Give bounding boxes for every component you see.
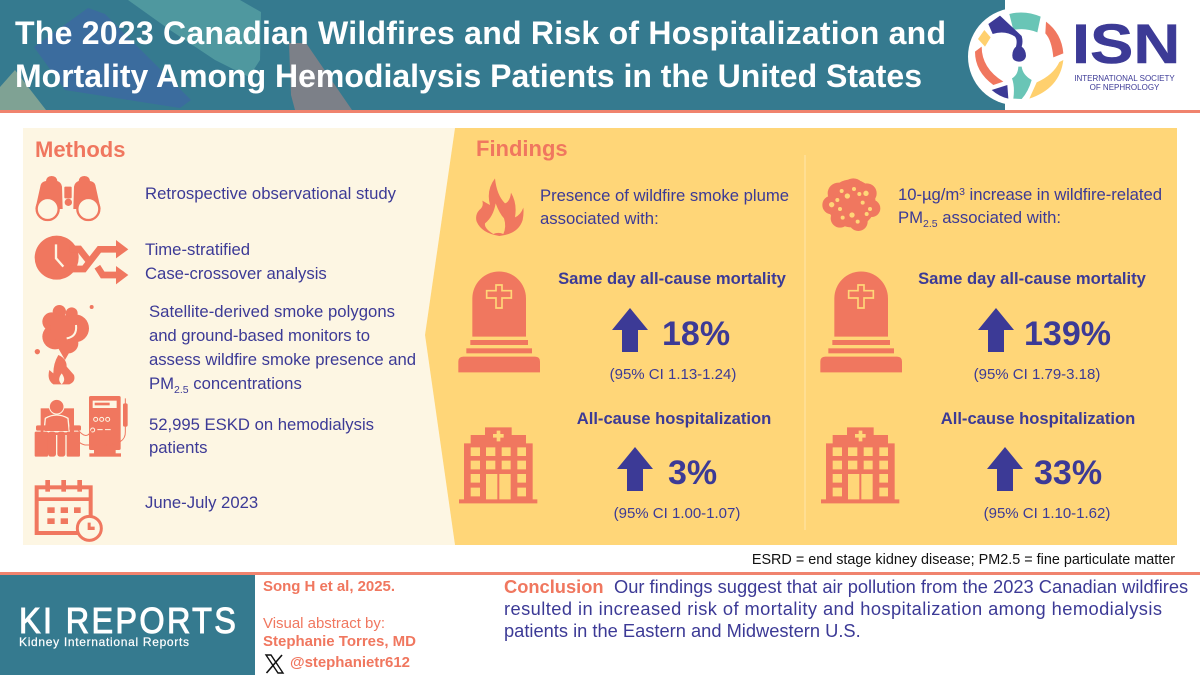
arrow: increase 18% (612, 308, 648, 352)
finding: same day mortality, PM2.5: (95% CI 1.79-3.18) (974, 366, 1100, 383)
heading: findings: Findings (476, 136, 568, 161)
text: exposure assessment: concentrations (189, 374, 302, 393)
icon: tombstone right (820, 271, 902, 372)
text: population: 52,995 ESKD on hemodialysis (149, 415, 374, 434)
finding: hospitalization, PM2.5 (941, 409, 1135, 522)
icon: particulate cloud (822, 178, 880, 231)
conclusion: resulted in increased risk of mortality and hospitalization among hemodialysis (504, 598, 1162, 619)
icon: hospital left (459, 427, 537, 503)
finding: same day mortality, smoke plume (558, 269, 787, 383)
text: PM2.5 exposure: PM (898, 208, 923, 227)
citation and credit (263, 578, 416, 671)
header banner (0, 0, 1200, 113)
footer: journal branding: KI REPORTS (19, 601, 236, 641)
icon: dialysis patient and machine (35, 396, 128, 457)
citation and credit: Song H et al, 2025. (263, 578, 395, 595)
text: exposure assessment: PM (149, 374, 174, 393)
finding: same day mortality, PM2.5: Same day all-cause mortality (918, 269, 1147, 288)
text: smoke plume exposure: Presence of wildfire smoke plume (540, 186, 789, 205)
text: population: patients (149, 438, 207, 457)
icon: calendar with clock (37, 480, 101, 540)
text: exposure assessment: assess wildfire smoke presence and (149, 350, 416, 369)
ISN wordmark: ISN (1072, 12, 1180, 75)
text: PM2.5 exposure: 3 (959, 186, 965, 198)
conclusion: Conclusion (504, 576, 604, 597)
ISN wordmark: OF NEPHROLOGY (1090, 83, 1160, 92)
text: exposure assessment: 2.5 (174, 384, 189, 396)
text: PM2.5 exposure (898, 185, 1162, 230)
text: exposure assessment: Satellite-derived smoke polygons (149, 302, 395, 321)
panel: methods background (23, 128, 455, 545)
icon: smoke and fire (35, 305, 94, 384)
conclusion (504, 576, 1188, 641)
icon: flame (476, 178, 524, 236)
finding: hospitalization, smoke plume: (95% CI 1.00-1.07) (614, 505, 740, 522)
icon: X logo (266, 655, 283, 673)
finding: same day mortality, PM2.5 (918, 269, 1147, 383)
text: smoke plume exposure (540, 186, 789, 228)
finding: same day mortality, smoke plume: (95% CI 1.13-1.24) (610, 366, 736, 383)
icon: hospital right (821, 427, 899, 503)
finding: hospitalization, PM2.5: (95% CI 1.10-1.62) (984, 505, 1110, 522)
icon: tombstone left (458, 271, 540, 372)
finding: same day mortality, smoke plume: Same day all-cause mortality (558, 269, 787, 288)
logo: ISN (968, 8, 1065, 105)
text: exposure assessment (149, 302, 416, 396)
panel: findings background (425, 128, 1177, 545)
title (15, 15, 946, 94)
text: study design: Retrospective observational study (145, 184, 397, 203)
text: population (149, 415, 374, 457)
text: PM2.5 exposure: 10-µg/m (898, 185, 959, 204)
title: The 2023 Canadian Wildfires and Risk of Hospitalization and (15, 15, 946, 51)
arrow: increase 139% (978, 308, 1014, 352)
conclusion: Our findings suggest that air pollution from the 2023 Canadian wildfires (614, 576, 1188, 597)
finding: hospitalization, smoke plume: 3% (668, 454, 717, 492)
finding: hospitalization, PM2.5: All-cause hospitalization (941, 409, 1135, 428)
heading: methods: Methods (35, 137, 125, 162)
citation and credit: Visual abstract by: (263, 615, 385, 632)
text: PM2.5 exposure: increase in wildfire-related (965, 185, 1162, 204)
finding: hospitalization, smoke plume: All-cause hospitalization (577, 409, 771, 428)
abbreviations note: ESRD = end stage kidney disease; PM2.5 = fine particulate matter (752, 552, 1175, 568)
text: PM2.5 exposure: associated with: (938, 208, 1061, 227)
finding: hospitalization, PM2.5: 33% (1034, 454, 1102, 492)
finding: hospitalization, smoke plume (577, 409, 771, 522)
citation and credit: @stephanietr612 (290, 654, 410, 671)
footer: journal branding: Kidney International Reports (19, 635, 189, 649)
footer: journal branding (0, 575, 255, 675)
text: analysis (145, 240, 327, 283)
text: smoke plume exposure: associated with: (540, 209, 659, 228)
arrow: increase 33% (987, 447, 1023, 491)
citation and credit: Stephanie Torres, MD (263, 633, 416, 650)
ISN wordmark: INTERNATIONAL SOCIETY (1074, 74, 1175, 83)
footer rule (0, 572, 1200, 575)
text: exposure assessment: and ground-based monitors to (149, 326, 370, 345)
title: Mortality Among Hemodialysis Patients in the United States (15, 58, 922, 94)
icon: clock with crossing arrows (35, 236, 128, 284)
text: analysis: Case-crossover analysis (145, 264, 327, 283)
conclusion: patients in the Eastern and Midwestern U.S. (504, 620, 861, 641)
text: study period: June-July 2023 (145, 493, 258, 512)
finding: same day mortality, PM2.5: 139% (1024, 315, 1111, 353)
text: analysis: Time-stratified (145, 240, 250, 259)
finding: same day mortality, smoke plume: 18% (662, 315, 730, 353)
text: PM2.5 exposure: 2.5 (923, 218, 938, 230)
arrow: increase 3% (617, 447, 653, 491)
icon: binoculars (35, 176, 101, 220)
